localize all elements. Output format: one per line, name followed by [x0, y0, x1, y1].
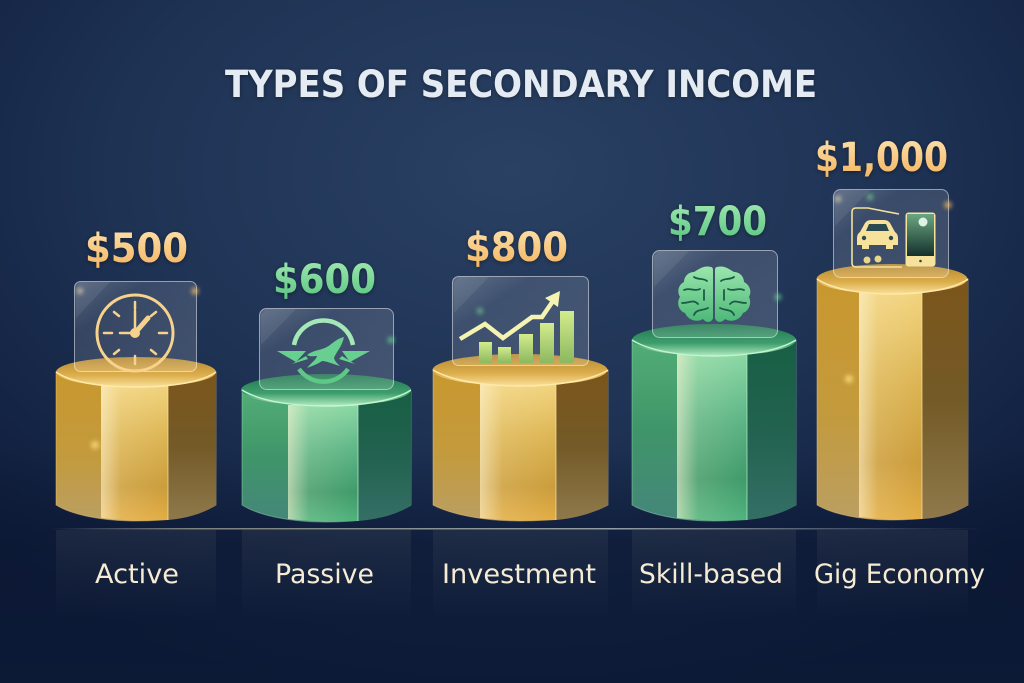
bar: Investment — [432, 354, 608, 521]
ground line and reflections — [50, 528, 985, 620]
bar: Passive — [241, 374, 411, 522]
value: $800: $800 — [465, 225, 568, 271]
label: Investment: Investment — [442, 559, 596, 590]
sparkles — [77, 194, 952, 449]
glass panel: Gig Economy — [834, 190, 948, 278]
label: Active: Active — [95, 559, 179, 590]
glass panel: Active — [74, 282, 196, 372]
value: $700: $700 — [668, 199, 767, 245]
bar: Skill-based — [632, 324, 796, 521]
bar: Active — [56, 357, 216, 521]
bar: Gig Economy — [816, 264, 968, 520]
title: TYPES OF SECONDARY INCOME — [225, 63, 817, 106]
value: $500: $500 — [85, 226, 188, 272]
glass panel: Passive — [260, 308, 394, 390]
icon: passive cycle bird — [277, 320, 370, 382]
icon: clock — [97, 295, 173, 371]
glass panel: Investment — [452, 276, 588, 366]
icon: growth chart — [460, 291, 574, 363]
value: $1,000: $1,000 — [815, 135, 948, 181]
icon: brain — [678, 267, 750, 322]
icon: car and phone — [852, 208, 936, 267]
value: $600: $600 — [273, 257, 376, 303]
label: Skill-based: Skill-based — [639, 559, 783, 590]
label: Passive: Passive — [275, 559, 374, 590]
glass panel: Skill-based — [652, 250, 778, 338]
label: Gig Economy: Gig Economy — [814, 559, 985, 590]
